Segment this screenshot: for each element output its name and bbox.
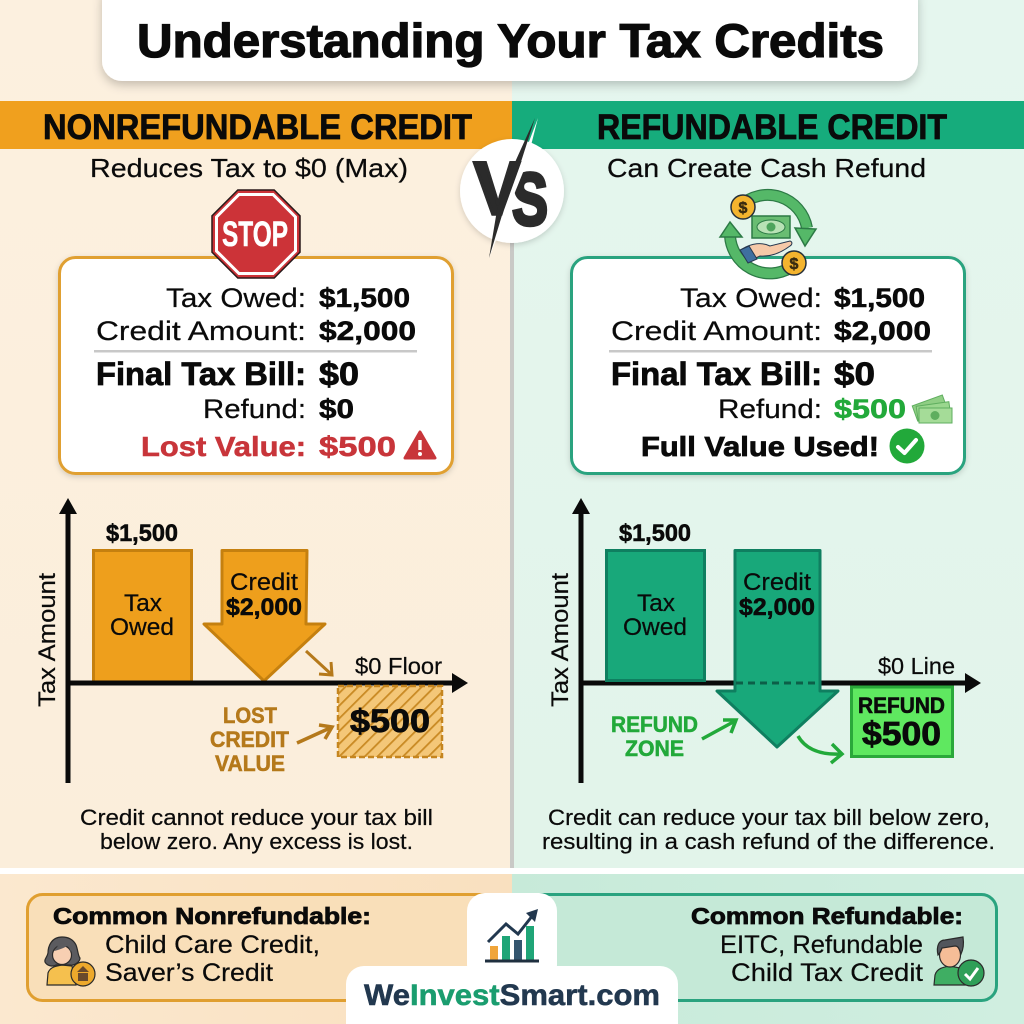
curved arrow to refund box [798, 736, 842, 763]
footer card [346, 966, 678, 1024]
row: lost value: Lost Value: [141, 431, 306, 462]
arrow: credit: $2,000 [226, 594, 302, 621]
list: Child Tax Credit [731, 959, 923, 987]
row: refund [203, 394, 354, 424]
row: tax owed [166, 283, 410, 313]
arrow: credit: Credit [743, 569, 811, 596]
lost credit box [338, 686, 442, 757]
row: tax owed [680, 283, 925, 313]
refund box: REFUND [858, 693, 945, 718]
row: tax owed: $1,500 [834, 283, 925, 313]
centre divider [510, 149, 514, 868]
brand: WeInvestSmart.com [364, 979, 660, 1012]
y axis [572, 498, 590, 783]
panel: common refundable [528, 894, 996, 1000]
row: refund: $500 [834, 394, 906, 424]
heading: Common Nonrefundable: [53, 903, 371, 929]
row: refund [718, 394, 906, 424]
title: Understanding Your Tax Credits [137, 14, 884, 67]
title card [102, 0, 918, 81]
icon: man with check [934, 937, 984, 986]
pointer arrow to floor [306, 651, 332, 675]
caption: refundable [542, 805, 995, 854]
row: lost value: $500 [319, 431, 396, 462]
y axis label: Tax Amount [34, 573, 61, 707]
list: EITC, Refundable [720, 931, 923, 959]
row: credit amount [96, 316, 416, 346]
zero line label: $0 Line [878, 653, 955, 679]
arrow: credit: Credit [230, 569, 298, 596]
row: credit amount [611, 316, 931, 346]
arrow: credit [717, 550, 838, 747]
caption: nonrefundable: below zero. Any excess is lost. [100, 829, 413, 854]
list [105, 931, 320, 987]
y axis [59, 498, 77, 783]
caption: refundable: Credit can reduce your tax bill below zero, [548, 805, 990, 830]
lost credit label: VALUE [215, 751, 285, 776]
caption: nonrefundable: Credit cannot reduce your tax bill [80, 805, 433, 830]
card: refundable figures [572, 258, 964, 474]
subtitle: nonrefundable: Reduces Tax to $0 (Max) [90, 153, 408, 183]
icon: stop sign [212, 190, 300, 278]
refund zone label: REFUND [611, 712, 698, 737]
bottom band: left [0, 874, 512, 1024]
row: final tax bill: $0 [834, 356, 875, 392]
row: refund: Refund: [718, 394, 822, 424]
lost credit label [210, 703, 290, 776]
subtitle: refundable: Can Create Cash Refund [607, 153, 926, 183]
refund zone label [611, 712, 698, 761]
row: tax owed: Tax Owed: [166, 283, 306, 313]
x axis [68, 673, 468, 693]
chart: refundable [547, 498, 981, 783]
floor label: $0 Floor [355, 653, 442, 679]
bar: tax owed: Owed [623, 614, 687, 641]
chart: nonrefundable [34, 498, 468, 783]
VS badge: S [512, 158, 548, 241]
row: credit amount: Credit Amount: [611, 316, 822, 346]
header: nonrefundable credit: NONREFUNDABLE CREDIT [43, 108, 472, 147]
header: refundable credit: REFUNDABLE CREDIT [597, 108, 947, 147]
row: credit amount: $2,000 [319, 316, 416, 346]
row: credit amount: Credit Amount: [96, 316, 306, 346]
VS badge [460, 118, 564, 258]
row: final tax bill: $0 [319, 356, 359, 392]
value: $1,500: $1,500 [106, 520, 178, 547]
header: refundable credit [512, 101, 1024, 149]
background: right panel [512, 0, 1024, 868]
list: Saver’s Credit [105, 959, 273, 987]
logo tile [467, 893, 557, 983]
refund box: $500 [862, 715, 941, 752]
icon: cash refund cycle: $ [790, 256, 798, 273]
arrow: credit: $2,000 [739, 594, 815, 621]
list [720, 931, 923, 987]
bar: tax owed: Owed [110, 614, 174, 641]
row: full value used: Full Value Used! [641, 431, 879, 462]
lost credit box: $500 [350, 703, 430, 739]
row: final tax bill: Final Tax Bill: [96, 356, 306, 392]
y axis label: Tax Amount [547, 573, 574, 707]
icon: woman with bank coin [45, 937, 95, 986]
icon: cash refund cycle: $ [738, 200, 748, 217]
bar: tax owed: Tax [637, 590, 675, 617]
pointer arrow to lost box [297, 725, 332, 743]
icon: warning triangle [405, 432, 435, 458]
row: refund: $0 [319, 394, 354, 424]
row: tax owed: Tax Owed: [680, 283, 822, 313]
bar: tax owed [94, 550, 192, 684]
row: final tax bill: Final Tax Bill: [611, 356, 822, 392]
caption: refundable: resulting in a cash refund of the difference. [542, 829, 995, 854]
refund box [852, 687, 952, 756]
lost credit label: CREDIT [210, 727, 290, 752]
bottom band: right [512, 874, 1024, 1024]
heading: Common Refundable: [691, 903, 963, 929]
lost credit label: LOST [223, 703, 278, 728]
x axis [581, 673, 981, 693]
pointer arrow to refund zone [702, 720, 736, 739]
background: left panel [0, 0, 512, 868]
icon: banknotes [912, 395, 952, 423]
arrow: credit [204, 550, 325, 681]
caption: nonrefundable [80, 805, 433, 854]
panel: common nonrefundable [28, 894, 498, 1000]
bar: tax owed: Tax [124, 590, 162, 617]
list: Child Care Credit, [105, 931, 320, 959]
icon: growth chart [485, 909, 539, 962]
refund zone label: ZONE [625, 736, 684, 761]
VS badge: V [474, 147, 522, 230]
icon: green check [890, 428, 924, 464]
value: $1,500: $1,500 [619, 520, 691, 547]
row: refund: Refund: [203, 394, 306, 424]
icon: stop sign: STOP [222, 215, 288, 254]
row: credit amount: $2,000 [834, 316, 931, 346]
bar: tax owed [606, 550, 704, 680]
row: lost value [141, 431, 396, 462]
card: nonrefundable figures [60, 258, 452, 474]
icon: cash refund cycle [720, 195, 816, 275]
row: tax owed: $1,500 [319, 283, 410, 313]
